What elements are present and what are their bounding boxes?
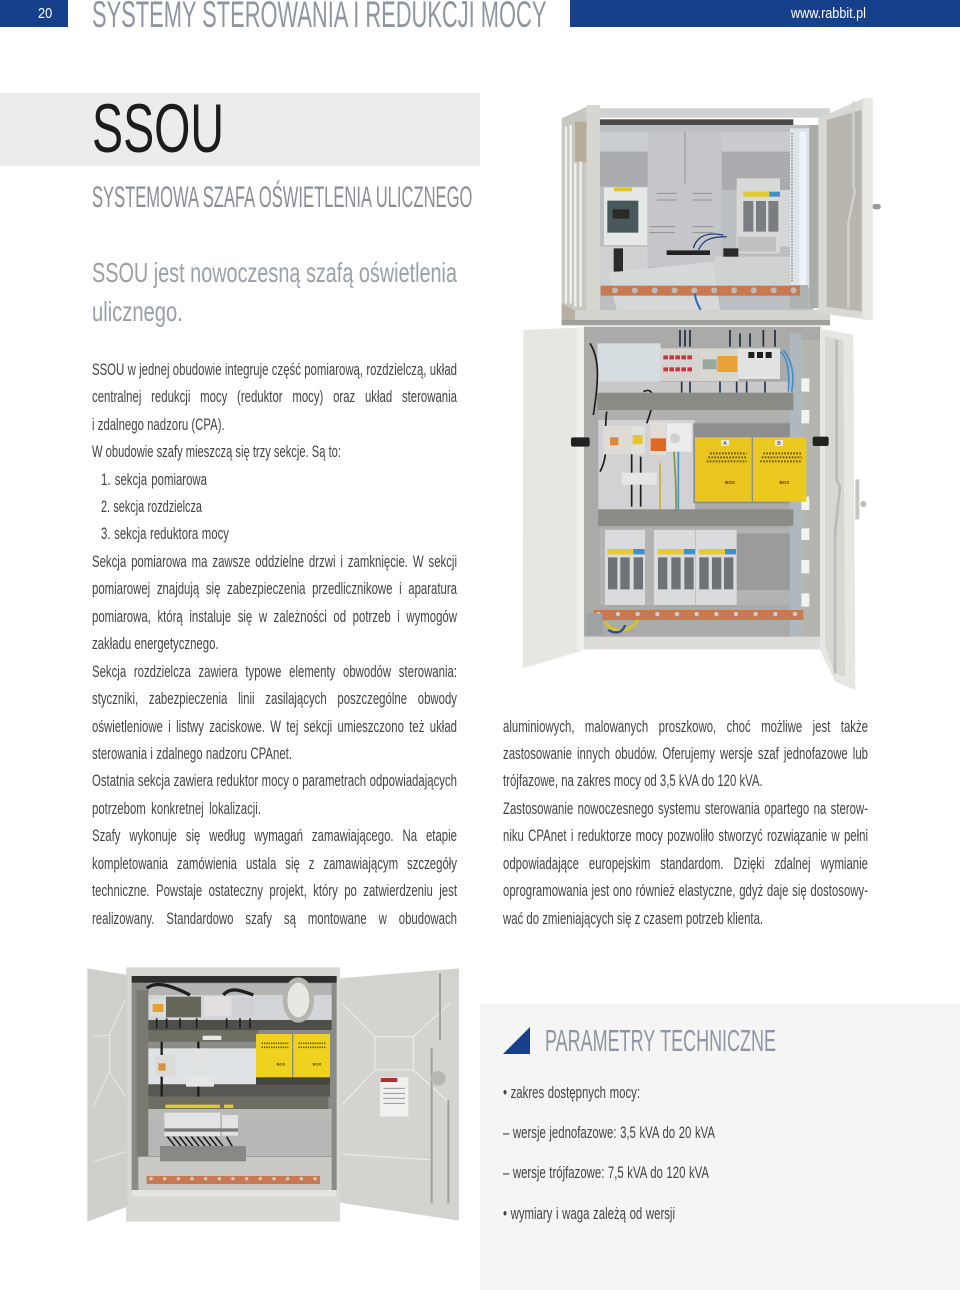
parameter: single-phase: – wersje jednofazowe: 3,5 kVA do 20 kVA (503, 1124, 715, 1142)
body text left column: Sekcja pomiarowa ma zawsze oddzielne drzwi i zamknięcie. W sekcji (92, 553, 457, 571)
body text left column: 1. sekcja pomiarowa (101, 471, 207, 489)
body text right column: niku CPAnet i reduktorze mocy pozwoliło stworzyć rozwiązanie w pełni (503, 827, 868, 845)
body text right column: zastosowanie innych obudów. Oferujemy wersje szaf jednofazowe lub (503, 745, 868, 763)
photo: open street-lighting cabinet, metering section (562, 98, 881, 325)
body text left column: oświetleniowe i listwy zaciskowe. W tej sekcji umieszczono też układ (92, 718, 457, 736)
fuse switches (605, 530, 737, 605)
grey sheet (608, 262, 720, 310)
cabinet bottom frame (575, 310, 830, 325)
photo: open cabinet, distribution and reductor sections (522, 320, 866, 690)
body text left column: pomiarowej znajdują się zabezpieczenia przedlicznikowe i aparatura (92, 580, 457, 598)
body text left column: 3. sekcja reduktora mocy (101, 525, 229, 543)
header bar right (570, 0, 960, 27)
website address: www.rabbit.pl (791, 5, 866, 22)
body text left column: realizowany. Standardowo szafy są montowane w obudowach (92, 910, 457, 928)
body text left column: Sekcja rozdzielcza zawiera typowe elementy obwodów sterowania: (92, 663, 457, 681)
body text right column: trójfazowe, na zakres mocy od 3,5 kVA do 120 kVA. (503, 772, 763, 790)
yellow power reductor boxes (256, 1034, 330, 1085)
photo: open cabinet front view (87, 967, 459, 1222)
intro line 2: ulicznego. (92, 296, 183, 327)
icon: blue triangle (503, 1027, 530, 1054)
open door (818, 98, 881, 320)
body text left column: 2. sekcja rozdzielcza (101, 498, 202, 516)
wiring (590, 330, 793, 510)
panel: technical parameters (480, 1004, 960, 1290)
intro text (92, 257, 457, 327)
cables (667, 234, 738, 257)
cabinet interior (600, 108, 830, 312)
body text left column: styczniki, zabezpieczenia linii zasilających poszczególne obwody (92, 690, 457, 708)
body text right column: aluminiowych, malowanych proszkowo, choć możliwe jest także (503, 718, 868, 736)
middle row devices (603, 422, 692, 485)
yellow power reductor boxes: B (777, 441, 781, 447)
copper busbar (601, 286, 800, 310)
lamp (283, 977, 314, 1023)
dark shelf bars (148, 1030, 328, 1109)
door of modular housing (604, 187, 647, 245)
body text left column: pomiarowa, którą instaluje się w zależności od potrzeb i wymogów (92, 608, 457, 626)
body text left column: SSOU w jednej obudowie integruje część pomiarową, rozdzielczą, układ (92, 361, 457, 379)
body text left column: zakładu energetycznego. (92, 635, 219, 653)
body text left column: Szafy wykonuje się według wymagań zamawiającego. Na etapie (92, 827, 457, 845)
body text right column: wać do zmieniających się z czasem potrzeb klienta. (503, 910, 763, 928)
body text left column: sterowania i zdalnego nadzoru CPAnet. (92, 745, 292, 763)
body text right column: oprogramowania jest ono również elastyczne, gdyż daje się dostosowy- (503, 882, 868, 900)
cabinet interior (562, 320, 830, 638)
body text left column: potrzebom konkretnej lokalizacji. (92, 800, 261, 818)
yellow power reductor boxes: A (723, 441, 727, 447)
subtitle: SYSTEMOWA SZAFA OŚWIETLENIA ULICZNEGO (92, 181, 472, 214)
dark shelf bars (597, 393, 793, 526)
intro line 1: SSOU jest nowoczesną szafą oświetlenia (92, 257, 457, 288)
title band (0, 93, 480, 166)
yellow power reductor boxes: BOX (779, 480, 790, 485)
mounting rail (790, 125, 819, 308)
body text right column (503, 718, 868, 928)
parameter: dimensions: • wymiary i waga zależą od wersji (503, 1205, 675, 1223)
left door (87, 968, 127, 1222)
copper busbar (586, 610, 803, 635)
header bar left with page number (0, 0, 68, 27)
body text left column: i zdalnego nadzoru (CPA). (92, 416, 225, 434)
parameter: three-phase: – wersje trójfazowe: 7,5 kVA do 120 kVA (503, 1164, 709, 1182)
cabinet left side (562, 105, 600, 325)
yellow power reductor boxes: BOX (313, 1061, 322, 1066)
body text left column: centralnej redukcji mocy (reduktor mocy) oraz układ sterowania (92, 388, 457, 406)
body text left column (92, 361, 457, 928)
parameter: available power: • zakres dostępnych mocy: (503, 1084, 640, 1102)
middle row contactors (155, 1042, 214, 1097)
parameters heading: PARAMETRY TECHNICZNE (545, 1023, 776, 1058)
top row modules (147, 985, 254, 1028)
left door (523, 327, 590, 668)
yellow power reductor boxes: BOX (725, 480, 736, 485)
copper busbar (147, 1176, 320, 1184)
cabinet body (126, 967, 340, 1222)
circuit breakers and terminals (160, 1106, 246, 1161)
body text right column: odpowiadające europejskim standardom. Dzięki zdalnej wymianie (503, 855, 868, 873)
body text left column: kompletowania zamówienia ustala się z zamawiającym szczegóły (92, 855, 457, 873)
right door (340, 968, 459, 1221)
mounting rail (790, 333, 801, 637)
right door (813, 328, 866, 690)
body text left column: Ostatnia sekcja zawiera reduktor mocy o parametrach odpowiadających (92, 772, 457, 790)
yellow power reductor boxes: BOX (277, 1061, 286, 1066)
fuse switch (737, 178, 793, 253)
page number: 20 (38, 5, 52, 22)
body text left column: W obudowie szafy mieszczą się trzy sekcje. Są to: (92, 443, 341, 461)
body text right column: Zastosowanie nowoczesnego systemu sterowania opartego na sterow- (503, 800, 868, 818)
main title: SSOU (92, 90, 224, 167)
body text left column: techniczne. Powstaje ostateczny projekt, który po zatwierdzeniu jest (92, 882, 457, 900)
bottom frame (584, 637, 830, 649)
yellow power reductor boxes (695, 437, 806, 502)
top row modules (660, 348, 780, 381)
